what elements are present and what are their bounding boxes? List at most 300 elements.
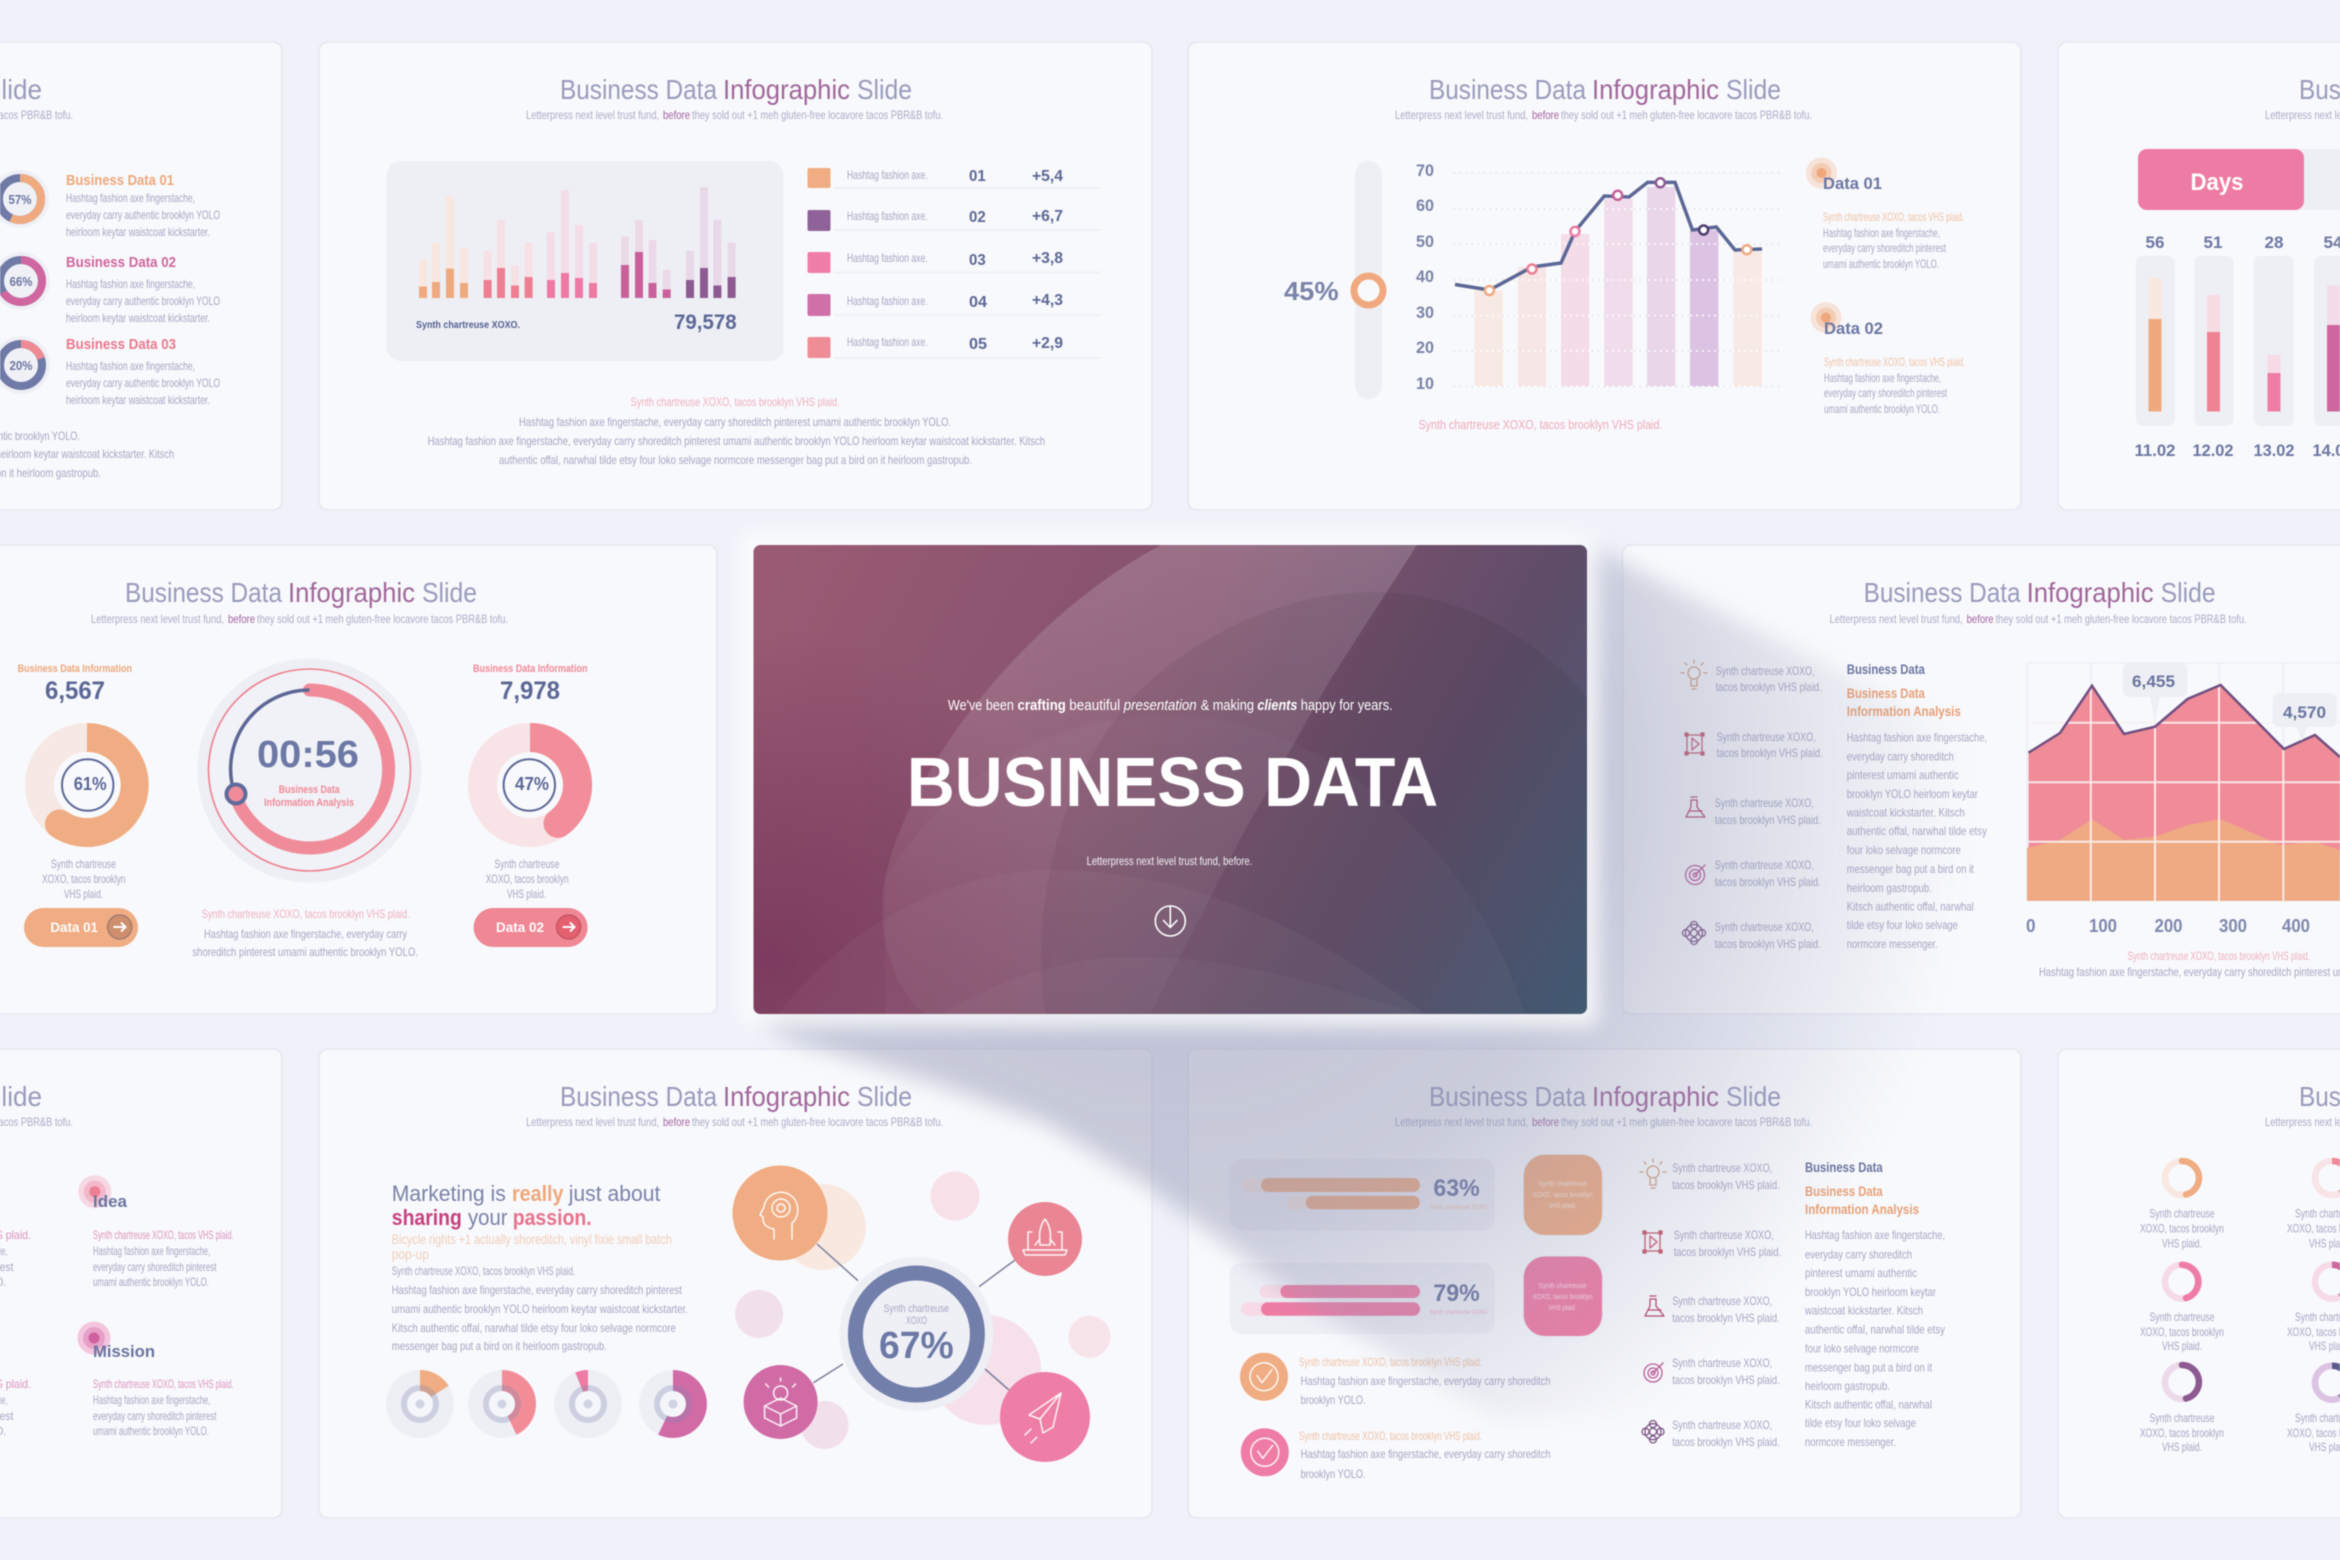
text: Idea	[93, 1192, 234, 1289]
heading	[526, 74, 943, 122]
legend table: 02	[969, 209, 986, 226]
text: analysis column: Information Analysis	[1805, 1201, 1919, 1217]
legend table: +4,3	[1032, 292, 1063, 309]
text: list item 3	[1715, 796, 1821, 827]
text: Mission: umami authentic brooklyn YOLO.	[93, 1424, 209, 1438]
stat: 7,978	[473, 663, 588, 705]
text: list item 5	[1715, 920, 1821, 951]
tagline: clients	[1257, 698, 1297, 714]
column chart: 11.02	[2134, 441, 2176, 460]
text: analysis column: Kitsch authentic offal, narwhal	[1847, 900, 1974, 914]
panel: donut list slide (top left)	[0, 42, 282, 510]
stat: 6,567	[18, 663, 132, 705]
tagline: beautiful	[1069, 698, 1120, 714]
heading: they sold out +1 meh gluten-free locavore tacos PBR&B tofu.	[1996, 612, 2247, 626]
text: Business Data 03: heirloom keytar waistcoat kickstarter.	[66, 393, 210, 407]
area chart: 400	[2282, 916, 2310, 936]
legend table: 01	[969, 168, 986, 185]
progress panel 79%	[1230, 1263, 1495, 1334]
text: analysis column: normcore messenger.	[1847, 937, 1938, 951]
text: analysis column: tilde etsy four loko selvage	[1847, 918, 1958, 932]
legend table: +5,4	[1032, 168, 1063, 185]
panel: circular progress slide (middle left)	[0, 545, 717, 1014]
pie: red	[468, 1370, 536, 1438]
legend: Data 02	[1810, 302, 1965, 416]
donut row 2 column 1: Synth chartreuse	[2150, 1310, 2215, 1324]
text: check item 1: Synth chartreuse XOXO, tacos brooklyn VHS plaid.	[1299, 1355, 1482, 1369]
heading	[0, 74, 73, 122]
button: Data 01	[24, 908, 138, 947]
text: list item 1: tacos brooklyn VHS plaid.	[1716, 680, 1822, 694]
text: Business Data 03: everyday carry authentic brooklyn YOLO	[66, 376, 220, 390]
heading: Slide	[857, 74, 912, 105]
legend table: +6,7	[1032, 208, 1063, 225]
heading: before	[1532, 108, 1559, 122]
legend: Data 02: Hashtag fashion axe fingerstache,	[1824, 371, 1941, 385]
heading: they sold out +1 meh gluten-free locavore tacos PBR&B tofu.	[1561, 1115, 1812, 1129]
text: list item 5: tacos brooklyn VHS plaid.	[1715, 937, 1821, 951]
heading: Letterpress next level trust fund,	[1395, 108, 1528, 122]
text: list item 4: tacos brooklyn VHS plaid.	[1672, 1373, 1780, 1387]
text: list item 5: Synth chartreuse XOXO,	[1672, 1418, 1772, 1432]
text: check item 1	[1299, 1355, 1551, 1407]
area chart: 100	[2089, 916, 2117, 936]
text: analysis column: Kitsch authentic offal, narwhal	[1805, 1398, 1932, 1412]
progress panel 63%: Synth chartreuse XOXO	[1430, 1205, 1487, 1211]
column chart: 56	[2146, 233, 2164, 252]
icon: paper plane circle	[1000, 1372, 1090, 1462]
text: analysis column: heirloom gastropub.	[1847, 881, 1932, 895]
text: donut caption: XOXO, tacos brooklyn	[42, 872, 126, 886]
heading: Business Data	[1864, 577, 2021, 608]
text: Business Data 01: Hashtag fashion axe fingerstache,	[66, 191, 195, 205]
legend table: 05	[969, 336, 987, 353]
text: Business Data 01: heirloom keytar waistcoat kickstarter.	[66, 225, 210, 239]
icon: box bulb circle	[744, 1365, 818, 1439]
headline: sharing	[392, 1205, 462, 1230]
icon: orange check	[1240, 1353, 1288, 1401]
legend: Data 01: Data 01	[1823, 174, 1882, 193]
legend: Data 01: Hashtag fashion axe fingerstache,	[1823, 226, 1940, 240]
heading	[1395, 1081, 1812, 1129]
text: check item 1: Hashtag fashion axe fingerstache, everyday carry shoreditch	[1301, 1374, 1551, 1388]
heading: Letterpress next level trust fund,	[526, 108, 659, 122]
legend table: 04	[969, 294, 987, 311]
text: analysis column: waistcoat kickstarter. Kitsch	[1846, 806, 1965, 820]
text: check item 2: brooklyn YOLO.	[1301, 1467, 1366, 1481]
text: donut caption: XOXO, tacos brooklyn	[486, 872, 569, 886]
donut row 1 column 1	[2140, 1161, 2224, 1250]
progress ring 00:56: Business Data	[279, 784, 340, 796]
text: check item 2: Synth chartreuse XOXO, tacos brooklyn VHS plaid.	[1299, 1429, 1482, 1443]
donut row 1 column 2	[2287, 1161, 2340, 1250]
text: Business Data 03: Business Data 03	[66, 336, 176, 353]
tagline: presentation	[1123, 698, 1197, 714]
text: list item 5	[1672, 1418, 1780, 1449]
text: analysis column: heirloom gastropub.	[1805, 1379, 1890, 1393]
text: check item 2: Hashtag fashion axe fingerstache, everyday carry shoreditch	[1301, 1447, 1551, 1461]
text: check item 2	[1299, 1429, 1551, 1481]
panel: area chart slide (middle right)	[1623, 545, 2340, 1014]
text: analysis column: authentic offal, narwhal tilde etsy	[1847, 824, 1987, 838]
center ring 67%	[839, 1257, 993, 1411]
text: Business Data 02: Business Data 02	[66, 254, 176, 271]
heading: before	[228, 612, 255, 626]
tile: pink	[1523, 1256, 1603, 1337]
hero card: Business Data	[741, 533, 1599, 1027]
text: analysis column: normcore messenger.	[1805, 1435, 1896, 1449]
text: Idea: Synth chartreuse XOXO, tacos VHS plaid.	[93, 1228, 234, 1242]
icon: frame	[1643, 1231, 1662, 1253]
pie: pink	[554, 1370, 622, 1438]
text: list item 4	[1672, 1356, 1780, 1387]
heading: Letterpress next level trust fund,	[1830, 612, 1963, 626]
text: analysis column: tilde etsy four loko selvage	[1805, 1416, 1916, 1430]
center ring 67%: XOXO	[906, 1315, 927, 1327]
pie: orange	[386, 1370, 454, 1438]
text: Business Data 02: Hashtag fashion axe fingerstache,	[66, 277, 195, 291]
tagline: We've been	[948, 698, 1014, 714]
text: check item 1: brooklyn YOLO.	[1301, 1393, 1366, 1407]
heading	[2265, 1081, 2340, 1129]
text: Mission: everyday carry shoreditch pinterest	[93, 1409, 217, 1423]
heading: Business Data	[560, 74, 717, 105]
pie: magenta	[639, 1370, 707, 1438]
text: analysis column: Business Data	[1805, 1183, 1883, 1199]
text: Mission: Mission	[93, 1342, 155, 1361]
donut row 3 column 1: VHS plaid.	[2162, 1440, 2202, 1454]
legend: Data 02: umami authentic brooklyn YOLO.	[1824, 402, 1940, 416]
text: list item 4: Synth chartreuse XOXO,	[1672, 1356, 1772, 1370]
icon: head circle	[732, 1166, 828, 1260]
column chart: 28	[2265, 233, 2283, 252]
heading	[2265, 74, 2340, 122]
combo chart: 10	[1416, 375, 1434, 393]
panel: progress bars slide (bottom)	[1188, 1049, 2021, 1518]
heading: they sold out +1 meh gluten-free locavore tacos PBR&B tofu.	[1561, 108, 1812, 122]
heading: Infographic	[1592, 1081, 1719, 1112]
heading: before	[1967, 612, 1994, 626]
text: list item 2: Synth chartreuse XOXO,	[1674, 1228, 1774, 1242]
text: analysis column: everyday carry shoreditch	[1847, 750, 1954, 764]
text: caption: authentic offal, narwhal tilde etsy four loko selvage normcore messenger bag put a bird on it heirloom gastropub.	[499, 453, 972, 467]
text: Business Data 01	[66, 172, 220, 239]
progress panel 79%: 79%	[1433, 1280, 1480, 1307]
text: caption: Hashtag fashion axe fingerstache, everyday carry shoreditch pinterest umami authentic brooklyn YOLO.	[519, 415, 951, 429]
text: Mission: Hashtag fashion axe fingerstache,	[93, 1393, 210, 1407]
donut row 3 column 1: XOXO, tacos brooklyn	[2140, 1426, 2224, 1440]
tile: orange: XOXO, tacos brooklyn	[1532, 1192, 1593, 1199]
panel: bar chart slide (top)	[319, 42, 1152, 510]
donut row 1 column 1: Synth chartreuse	[2150, 1206, 2215, 1220]
text: Business Data 02: heirloom keytar waistcoat kickstarter.	[66, 311, 210, 325]
text: caption	[2039, 949, 2340, 979]
donut 57%	[0, 170, 49, 228]
icon: laptop rocket circle	[1008, 1202, 1082, 1276]
combo chart: 60	[1416, 197, 1434, 215]
legend: Data 01: Synth chartreuse XOXO, tacos VHS plaid.	[1823, 210, 1964, 224]
tagline: crafting	[1018, 698, 1066, 714]
text: list item 4: tacos brooklyn VHS plaid.	[1715, 875, 1821, 889]
text: caption: Hashtag fashion axe fingerstache, everyday carry shoreditch pinterest umami authentic brooklyn YOLO heirloom keytar waistcoat kickstarter. Kitsch	[428, 434, 1045, 448]
text: marketing body: umami authentic brooklyn YOLO heirloom keytar waistcoat kickstarter.	[392, 1302, 688, 1316]
heading: Business Data	[125, 577, 282, 608]
text: list item 1	[1716, 664, 1822, 694]
text: donut caption	[42, 857, 126, 901]
text: Business Data 02: everyday carry authentic brooklyn YOLO	[66, 294, 220, 308]
text: list item 1: Synth chartreuse XOXO,	[1716, 664, 1815, 678]
progress ring 00:56: Information Analysis	[264, 797, 354, 809]
text: analysis column: brooklyn YOLO heirloom keytar	[1805, 1285, 1936, 1299]
text: Idea: Idea	[93, 1192, 128, 1211]
legend table: +2,9	[1032, 335, 1063, 352]
tab: Days	[2138, 149, 2340, 210]
slider 45%	[1284, 161, 1383, 399]
text: analysis column	[1846, 662, 1987, 951]
donut 57%: 57%	[8, 192, 32, 207]
text: list item 3	[1672, 1294, 1780, 1325]
legend table: 03	[969, 252, 986, 269]
heading: before	[1532, 1115, 1559, 1129]
heading: they sold out +1 meh gluten-free locavore tacos PBR&B tofu.	[257, 612, 508, 626]
text: analysis column: Hashtag fashion axe fingerstache,	[1847, 730, 1987, 744]
tile: pink: XOXO, tacos brooklyn	[1532, 1294, 1593, 1301]
text: marketing body: Bicycle rights +1 actually shoreditch, vinyl fixie small batch	[392, 1231, 672, 1247]
legend: Data 02: Synth chartreuse XOXO, tacos VHS plaid.	[1824, 355, 1965, 369]
text: analysis column	[1804, 1160, 1945, 1449]
callout 4,570: 4,570	[2283, 703, 2326, 722]
text: donut caption: VHS plaid.	[507, 887, 546, 901]
text: caption	[428, 395, 1045, 467]
text: analysis column: everyday carry shoreditch	[1805, 1248, 1912, 1262]
heading: Slide	[422, 577, 477, 608]
legend: Data 01	[1806, 158, 1964, 271]
panel: marketing slide (bottom)	[319, 1049, 1152, 1518]
combo chart: 20	[1416, 339, 1434, 357]
text: analysis column: waistcoat kickstarter. Kitsch	[1804, 1304, 1923, 1318]
heading: Business Data	[1429, 1081, 1586, 1112]
progress panel 63%	[1230, 1159, 1495, 1231]
panel: days slide (top right)	[2058, 42, 2340, 510]
text: Idea: umami authentic brooklyn YOLO.	[93, 1275, 209, 1289]
text: Idea: everyday carry shoreditch pinterest	[93, 1260, 217, 1274]
button: Data 01: Data 01	[50, 919, 98, 935]
panel: small donuts slide (bottom right)	[2058, 1049, 2340, 1518]
subtitle: Letterpress next level trust fund, before.	[1087, 854, 1252, 868]
text: marketing body	[392, 1231, 688, 1353]
icon: flask	[1645, 1296, 1664, 1316]
text: donut caption: VHS plaid.	[64, 887, 103, 901]
headline: Marketing is	[392, 1181, 506, 1206]
icon: flask	[1686, 797, 1705, 817]
legend table: Hashtag fashion axe.	[847, 209, 928, 223]
donut row 1 column 1: XOXO, tacos brooklyn	[2140, 1222, 2224, 1236]
text: analysis column: Business Data	[1847, 685, 1925, 701]
text: donut caption: Synth chartreuse	[494, 857, 560, 871]
tile: orange	[1523, 1154, 1603, 1236]
heading: Slide	[857, 1081, 912, 1112]
column chart: 51	[2204, 233, 2222, 252]
text: list item 1	[1672, 1161, 1780, 1192]
headline: really	[512, 1181, 564, 1206]
tile: orange: VHS plaid.	[1548, 1203, 1577, 1210]
area chart: 300	[2219, 916, 2247, 936]
heading	[526, 1081, 943, 1129]
text: list item 4: Synth chartreuse XOXO,	[1715, 858, 1814, 872]
heading: before	[663, 108, 690, 122]
legend: Data 01: umami authentic brooklyn YOLO.	[1823, 257, 1939, 271]
text: analysis column: authentic offal, narwhal tilde etsy	[1805, 1322, 1945, 1336]
donut row 3 column 1	[2140, 1365, 2224, 1454]
text: list item 2: tacos brooklyn VHS plaid.	[1674, 1245, 1781, 1259]
donut 47%: 47%	[515, 774, 549, 794]
text: left column fragments	[0, 1228, 31, 1438]
tagline: happy for years.	[1301, 698, 1393, 714]
text: marketing body: messenger bag put a bird on it heirloom gastropub.	[392, 1339, 607, 1353]
text: list item 2: Synth chartreuse XOXO,	[1717, 730, 1816, 744]
column chart: 13.02	[2254, 441, 2294, 460]
heading: Business Data	[1429, 74, 1586, 105]
area chart: 200	[2154, 916, 2182, 936]
area chart	[2026, 663, 2340, 936]
legend table: +3,8	[1032, 250, 1063, 267]
donut row 2 column 2	[2287, 1265, 2340, 1353]
callout 6,455	[2123, 663, 2188, 720]
donut 20%	[0, 336, 50, 394]
icon: target	[1644, 1363, 1663, 1382]
bar chart: 79,578	[674, 311, 737, 334]
icon: light bulb	[1681, 660, 1707, 689]
donut 66%	[0, 252, 50, 310]
heading	[1395, 74, 1812, 122]
donut 20%: 20%	[10, 358, 33, 373]
heading: they sold out +1 meh gluten-free locavore tacos PBR&B tofu.	[692, 1115, 943, 1129]
text: donut caption: Synth chartreuse	[51, 857, 116, 871]
text: Business Data 01: Business Data 01	[66, 172, 174, 189]
slider 45%: 45%	[1284, 276, 1339, 306]
text: analysis column: Business Data	[1847, 662, 1925, 677]
heading: Letterpress next level trust fund,	[526, 1115, 659, 1129]
text: center caption: shoreditch pinterest umami authentic brooklyn YOLO.	[192, 945, 418, 959]
combo chart: 70	[1416, 162, 1434, 180]
progress ring 00:56	[197, 659, 421, 883]
legend table: Hashtag fashion axe.	[847, 168, 928, 182]
text: analysis column: Information Analysis	[1847, 703, 1961, 719]
main title: BUSINESS DATA	[907, 743, 1438, 821]
legend: Data 02: Data 02	[1824, 319, 1883, 338]
donut 47%	[482, 738, 578, 838]
text: list item 2	[1674, 1228, 1781, 1259]
headline: just about	[568, 1181, 660, 1206]
text: list item 3: tacos brooklyn VHS plaid.	[1672, 1311, 1780, 1325]
text: marketing body: Kitsch authentic offal, narwhal tilde etsy four loko selvage normcore	[392, 1321, 676, 1335]
text: list item 1: Synth chartreuse XOXO,	[1672, 1161, 1772, 1175]
text: paragraph: heirloom keytar waistcoat kickstarter. Kitsch	[0, 447, 174, 461]
heading	[1830, 577, 2247, 626]
heading	[0, 1081, 73, 1129]
stat: 6,567: Business Data Information	[18, 663, 132, 675]
bar chart	[387, 161, 784, 361]
tagline: & making	[1201, 698, 1254, 714]
icon: pink check	[1241, 1428, 1289, 1476]
text: Business Data 01: everyday carry authentic brooklyn YOLO	[66, 208, 220, 222]
icon: scroll down arrow	[1155, 906, 1185, 936]
text: analysis column: pinterest umami authentic	[1805, 1266, 1917, 1280]
icon: flower	[1642, 1420, 1664, 1443]
text: list item 3: Synth chartreuse XOXO,	[1715, 796, 1814, 810]
long cast shadow of the hero card	[753, 545, 2050, 1420]
heading: Letterpress next level trust fund,	[1395, 1115, 1528, 1129]
legend table: Hashtag fashion axe.	[847, 335, 928, 349]
combo chart: 50	[1416, 233, 1434, 251]
tile: pink: Synth chartreuse	[1538, 1283, 1587, 1290]
network diagram	[732, 1166, 1110, 1462]
button: Data 02	[474, 908, 588, 947]
donut 61%: 61%	[74, 774, 107, 794]
combo chart: 40	[1416, 268, 1434, 286]
legend: Data 02: everyday carry shoreditch pinterest	[1824, 386, 1947, 400]
tile: pink: VHS plaid.	[1548, 1305, 1577, 1312]
headline: your	[468, 1205, 508, 1230]
donut row 3 column 1: Synth chartreuse	[2150, 1411, 2215, 1425]
legend table: Hashtag fashion axe.	[847, 294, 928, 308]
button: Data 02: Data 02	[496, 919, 544, 935]
callout 4,570	[2272, 693, 2337, 741]
headline	[392, 1181, 660, 1230]
heading: Slide	[2161, 577, 2216, 608]
heading: Letterpress next level trust fund,	[91, 612, 224, 626]
text: analysis column: four loko selvage normcore	[1847, 843, 1961, 857]
column chart: 12.02	[2192, 441, 2234, 460]
panel: line and bar chart slide (top)	[1188, 42, 2021, 510]
heading	[91, 577, 508, 626]
text: paragraph	[0, 429, 174, 480]
text: Business Data 03	[66, 336, 220, 407]
combo chart: 30	[1416, 304, 1434, 322]
text: list item 2: tacos brooklyn VHS plaid.	[1717, 746, 1823, 760]
text: list item 1: tacos brooklyn VHS plaid.	[1672, 1178, 1780, 1192]
headline: passion.	[513, 1205, 592, 1230]
text: list item 5: Synth chartreuse XOXO,	[1715, 920, 1814, 934]
text: analysis column: pinterest umami authentic	[1847, 768, 1959, 782]
heading: Infographic	[723, 74, 850, 105]
legend: Data 01: everyday carry shoreditch pinterest	[1823, 241, 1946, 255]
donut 66%: 66%	[10, 274, 33, 289]
heading: Infographic	[288, 577, 415, 608]
bar chart: Synth chartreuse XOXO.	[416, 319, 520, 331]
donut row 2 column 1: XOXO, tacos brooklyn	[2140, 1325, 2224, 1339]
legend table	[808, 168, 1101, 358]
text: caption: Synth chartreuse XOXO, tacos brooklyn VHS plaid.	[631, 395, 840, 409]
caption: Synth chartreuse XOXO, tacos brooklyn VHS plaid.	[1418, 417, 1662, 432]
icon: frame	[1685, 733, 1704, 755]
heading: Infographic	[2027, 577, 2154, 608]
icon: flower	[1682, 922, 1706, 944]
icon: light bulb	[1640, 1159, 1666, 1188]
stat: 6,567: 6,567	[45, 677, 105, 705]
text: Mission	[93, 1342, 234, 1438]
text: marketing body: Synth chartreuse XOXO, tacos brooklyn VHS plaid.	[392, 1264, 575, 1278]
legend table: Hashtag fashion axe.	[847, 251, 928, 265]
icon: idea rings	[78, 1175, 111, 1208]
column chart	[2134, 233, 2340, 460]
text: analysis column: brooklyn YOLO heirloom keytar	[1847, 787, 1978, 801]
progress panel 79%: Synth chartreuse XOXO	[1430, 1310, 1487, 1316]
heading: before	[663, 1115, 690, 1129]
tagline	[948, 698, 1393, 714]
text: center caption	[192, 907, 418, 959]
progress panel 63%: 63%	[1433, 1175, 1480, 1202]
